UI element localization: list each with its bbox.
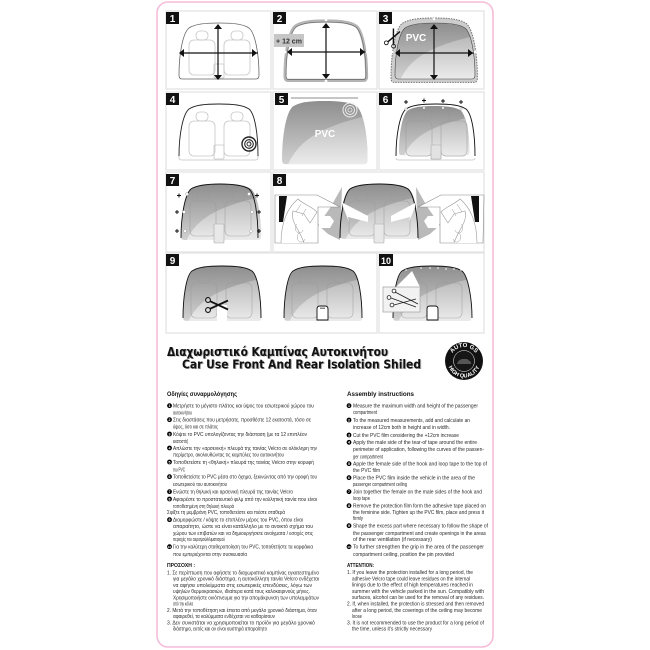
- Greek instruction steps: 9: [168, 518, 170, 522]
- icon: scissors: [384, 28, 402, 49]
- English instruction steps: To further strengthen the grip in the area of the passenger: [353, 544, 484, 550]
- English instruction steps: 6: [348, 476, 350, 480]
- English instruction steps: Join together the female on the male sides of the hook and: [353, 490, 482, 496]
- English warning: 2. If, when installed, the protection is stressed and then removed: [347, 602, 484, 608]
- Greek warning: 1. Σε περίπτωση που αφήσετε το διαχωριστικό καμπίνας εγκατεστημένο: [167, 570, 319, 576]
- English instruction steps: Apply the male side of the tear-of tape around the entire: [353, 440, 477, 446]
- right inset: hand: [418, 195, 484, 243]
- title: Διαχωριστικό Καμπίνας Αυτοκινήτου: [168, 346, 389, 360]
- Greek warning: Χρησιμοποιήστε οινόπνευμα για την απομάκρυνση των υπολειμμάτων: [173, 594, 319, 601]
- badge: high quality: HIGH QUALITY: [448, 365, 479, 378]
- panel 10: pins: [379, 253, 484, 333]
- Greek instruction steps: του PVC: [173, 468, 185, 474]
- panel 3: cut PVC: PVC: [406, 33, 426, 44]
- Greek warning: 3. Δεν συνιστάται να χρησιμοποιείται το προϊόν για μεγάλο χρονικό: [167, 619, 315, 626]
- Greek instruction steps: απαραίτητο, ώστε να είναι κατάλληλο με το ανοικτό σχήμα του: [173, 523, 313, 530]
- badge: high quality: [445, 342, 483, 380]
- Greek instruction steps: Απλώστε την «αρσενική» πλευρά της ταινίας Velcro σε ολόκληρη την: [173, 445, 317, 452]
- heading: English instructions: Assembly instructions: [347, 391, 414, 398]
- English instruction steps: increase of 12cm both in height and in width.: [353, 425, 450, 431]
- English warning: summer with the vehicle parked in the sun. Compatibly with: [352, 589, 484, 595]
- English instruction steps: 10: [347, 545, 351, 549]
- Greek instruction steps: 7: [168, 490, 170, 494]
- English warning: linings due to the effect of high temperatures reached in: [352, 583, 473, 589]
- Greek instruction steps: Μετρήστε το μέγιστο πλάτος και ύψος του εσωτερικού χώρου του: [173, 402, 314, 410]
- English instruction steps: Measure the maximum width and height of the passenger: [353, 404, 478, 410]
- English instruction steps: 8: [348, 504, 350, 508]
- Greek instruction steps: χώρου των επιβατών και να δημιουργήσετε ανοίγματα / εσοχές στις: [173, 530, 313, 537]
- panel 8: join and press: [273, 172, 484, 252]
- English instruction steps: 3: [348, 433, 350, 437]
- panel 2: add 12 cm: [273, 11, 377, 89]
- English instruction steps: 2: [348, 418, 350, 422]
- panel 9: cut opening: [166, 253, 377, 333]
- Greek warning: υψηλών θερμοκρασιών, ιδιαίτερα κατά τους καλοκαιρινούς μήνες.: [173, 588, 310, 595]
- Greek instruction steps: αυτοκινήτου: [173, 410, 192, 416]
- English instruction steps: 9: [348, 524, 350, 528]
- Greek instruction steps: Κόψτε το PVC υπολογίζοντας την διάσταση (με τα 12 επιπλέον: [173, 431, 307, 438]
- panel 7: press sides: [166, 172, 271, 252]
- Greek warning: διάστημα, εκτός και αν είναι αυστηρά απαραίτητο: [173, 626, 267, 632]
- title: [167, 345, 422, 373]
- panel 6: hang PVC on velcro: 6: [383, 95, 389, 106]
- panel 2: add 12 cm: 2: [277, 14, 283, 25]
- Greek instruction steps: ύψος, όσο και σε πλάτος: [173, 424, 218, 430]
- panel 4: apply velcro: 4: [170, 95, 176, 106]
- panel 5: PVC sheet: PVC: [315, 129, 335, 140]
- English warning: [347, 563, 485, 633]
- English instruction steps: To the measured measurements, add and calculate an: [353, 418, 470, 424]
- panel 7: press sides: 7: [170, 176, 176, 187]
- panel 9: cut opening: 9: [170, 256, 176, 267]
- English warning: 1. If you leave the protection installed for a long period, the: [347, 570, 473, 576]
- title: Car Use Front And Rear Isolation Shiled: [183, 358, 422, 373]
- panel 5: PVC sheet: [273, 92, 377, 170]
- English instruction steps: the PVC film: [353, 468, 380, 474]
- Greek instruction steps: Τοποθετείστε τη «θηλυκή» πλευρά της ταινίας Velcro στην κορυφή: [173, 459, 314, 466]
- Greek instruction steps: Αφαιρέστε το προστατευτικό φιλμ από την κολλητική ταινία που είναι: [173, 496, 317, 503]
- Greek instruction steps: 5: [168, 460, 170, 464]
- English instruction steps: Apple the female side of the hook and loop tape to the top of: [353, 462, 488, 468]
- pink outer frame: [157, 2, 493, 647]
- English instruction steps: of the rear ventilation (if necessary): [353, 537, 432, 543]
- Greek warning: να αφήσει υπολείμματα στις εσωτερικές επενδύσεις, λόγω των: [173, 582, 312, 589]
- Greek instruction steps: 6: [168, 475, 170, 479]
- panel 1: measure cabin: [166, 11, 271, 89]
- English instruction steps: ger compartment: [353, 454, 383, 460]
- panel 6: hang PVC on velcro: [379, 92, 484, 170]
- Greek instruction steps: τοποθετημένη στη θηλυκή πλευρά: [173, 503, 234, 510]
- Greek instruction steps: Για την καλύτερη σταθεροποίηση του PVC, τοποθετήστε τα καρφάκια: [173, 544, 313, 550]
- Greek instruction steps: Στις διαστάσεις που μετρήσατε, προσθέστε 12 εκατοστά, τόσο σε: [173, 416, 312, 424]
- Greek instruction steps: εσωτερικού του αυτοκινήτου: [173, 481, 227, 488]
- Greek warning: [167, 563, 319, 632]
- Greek instruction steps: 3: [168, 432, 170, 436]
- Greek instruction steps: Σφίξτε τη μεμβράνη PVC, τοποθετείστε και πιέστε σταθερά: [167, 509, 285, 516]
- English instruction steps: perimeter of application, following the curves of the passen-: [353, 447, 484, 453]
- English warning: surfaces, alcohol can be used for the removal of any residues.: [352, 595, 484, 601]
- title: Car Use Front And Rear Isolation Shiled: [182, 358, 421, 372]
- Greek instruction steps: που εμπεριέχονται στην συσκευασία: [173, 551, 247, 558]
- panel 2: add 12 cm: + 12 cm: [276, 38, 302, 46]
- Greek instruction steps: περίμετρο, ακολουθώντας τις καμπύλες του αυτοκινήτου: [173, 452, 284, 458]
- panel 3: cut PVC: [379, 11, 484, 89]
- Greek warning: ΠΡΟΣΟΧΗ :: [167, 563, 195, 569]
- Greek warning: αφαιρεθεί, τα καλύμματα ενδέχεται να καθαρίσουν: [173, 613, 275, 620]
- panel 1: measure cabin: 1: [170, 14, 176, 25]
- English instruction steps: passenger compartment ceiling: [353, 482, 407, 488]
- Greek warning: από την κόλλα: [173, 601, 193, 608]
- Greek instruction steps: [167, 402, 317, 558]
- Greek instruction steps: 10: [168, 545, 171, 549]
- inset: pins: [383, 287, 420, 312]
- English instruction steps: Place the PVC film inside the vehicle in the area of the: [353, 476, 475, 482]
- English warning: adhesive Velcro tape could leave residues on the internal: [352, 576, 470, 582]
- English instruction steps: 7: [348, 490, 350, 494]
- English instruction steps: the passenger compartment and create openings in the areas: [353, 531, 486, 537]
- English instruction steps: compartment ceiling, position the pin provided: [353, 552, 454, 558]
- panel 8: join and press: 8: [277, 176, 283, 187]
- English instruction steps: Shape the excess part where necessary to follow the shape of: [353, 524, 489, 530]
- English warning: after a long period, the coverings of the ceiling may become: [352, 608, 482, 614]
- English instruction steps: 1: [348, 404, 350, 408]
- English instruction steps: [347, 403, 489, 558]
- English instruction steps: 5: [348, 462, 350, 466]
- title: Διαχωριστικό Καμπίνας Αυτοκινήτου: [167, 345, 388, 360]
- English instruction steps: Remove the protection film form the adhesive tape placed on: [353, 504, 486, 510]
- English instruction steps: the feminine side. Tighten up the PVC film, place and press it: [353, 510, 485, 516]
- Greek warning: 2. Μετά την τοποθέτηση και έπειτα από μεγάλο χρονικό διάστημα, όταν: [167, 607, 317, 614]
- Greek warning: για μεγάλο χρονικό διάστημα, η αυτοκόλλητη ταινία Velcro ενδέχεται: [173, 576, 319, 583]
- English instruction steps: compartment: [353, 410, 377, 416]
- Greek instruction steps: 2: [168, 418, 170, 422]
- English warning: loose: [352, 614, 362, 620]
- Greek instruction steps: 8: [168, 497, 170, 501]
- English warning: 3. It is not recommended to use the product for a long period of: [347, 620, 485, 626]
- Greek instruction steps: εκατοστά): [173, 438, 188, 445]
- Greek instruction steps: Τοποθετείστε το PVC μέσα στο όχημα, ξεκινώντας από την οροφή του: [173, 474, 317, 480]
- English instruction steps: Cut the PVC film considering the +12cm increase: [353, 433, 459, 439]
- English instruction steps: loop tape: [353, 496, 370, 502]
- English warning: the time, unless it's strictly necessary: [352, 627, 432, 633]
- English instruction steps: firmly: [353, 516, 363, 522]
- icon: scissors: [206, 298, 228, 312]
- arrows: press inward: [343, 203, 415, 222]
- English warning: ATTENTION:: [347, 563, 374, 569]
- left inset: hand: [275, 195, 340, 243]
- panel 4: apply velcro: [166, 92, 271, 170]
- badge: high quality: AUTO GS: [450, 342, 478, 353]
- English instruction steps: 4: [348, 441, 350, 445]
- Greek instruction steps: 4: [168, 446, 170, 450]
- heading: Greek instructions: Οδηγίες συναρμολόγησης: [167, 390, 237, 398]
- Greek instruction steps: 1: [168, 404, 170, 408]
- Greek instruction steps: Διαμορφώστε / κόψτε το επιπλέον μέρος του PVC, όπου είναι: [173, 516, 303, 524]
- Greek instruction steps: περιοχές του αερισμού/κλιματισμού: [173, 536, 225, 543]
- panel 5: PVC sheet: 5: [279, 95, 285, 106]
- panel 3: cut PVC: 3: [383, 14, 389, 25]
- Greek instruction steps: Ενώστε τη θηλυκή και αρσενική πλευρά της ταινίας Velcro: [173, 488, 293, 496]
- panel 10: pins: 10: [381, 256, 391, 266]
